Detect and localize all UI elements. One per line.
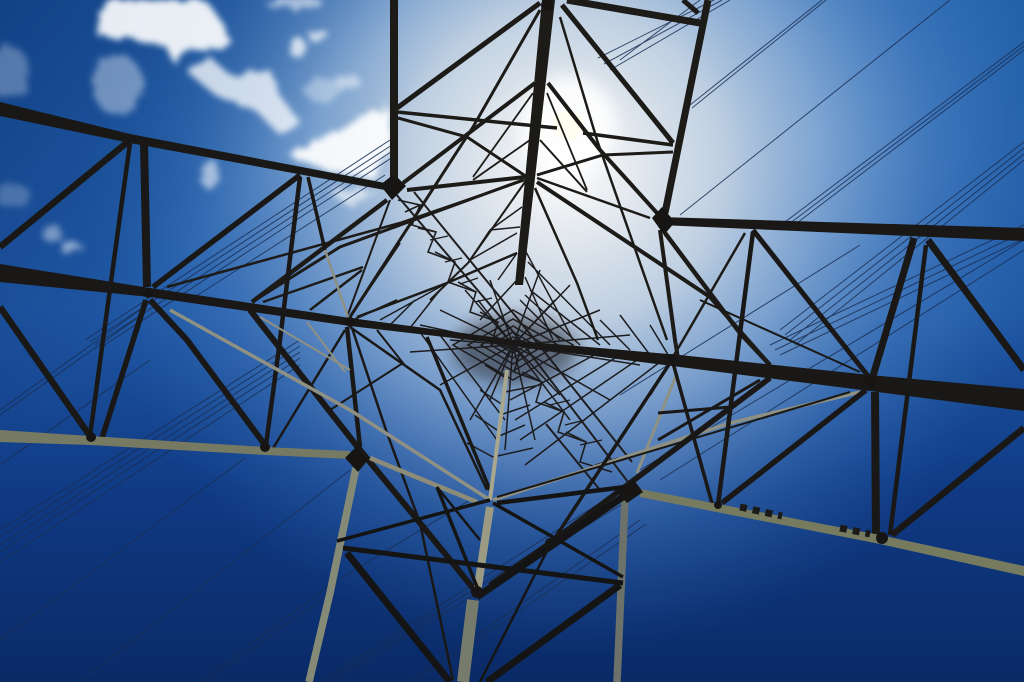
tower: sunlit lower chords and legs (0, 370, 1024, 682)
tower: right arm (490, 217, 1024, 585)
sun (520, 77, 616, 173)
tower: upper cage (167, 0, 770, 395)
clouds (0, 0, 392, 252)
tower: lower cage (337, 487, 630, 682)
tower: central mast top (515, 0, 555, 285)
tower: central fine lattice (395, 192, 632, 490)
tower: converging central fan (380, 207, 670, 465)
tower: dense centre shadow (453, 316, 577, 384)
tower: joint plates (86, 0, 888, 598)
tower: left arm (0, 102, 530, 680)
tower: sunlit bracing (170, 250, 860, 500)
